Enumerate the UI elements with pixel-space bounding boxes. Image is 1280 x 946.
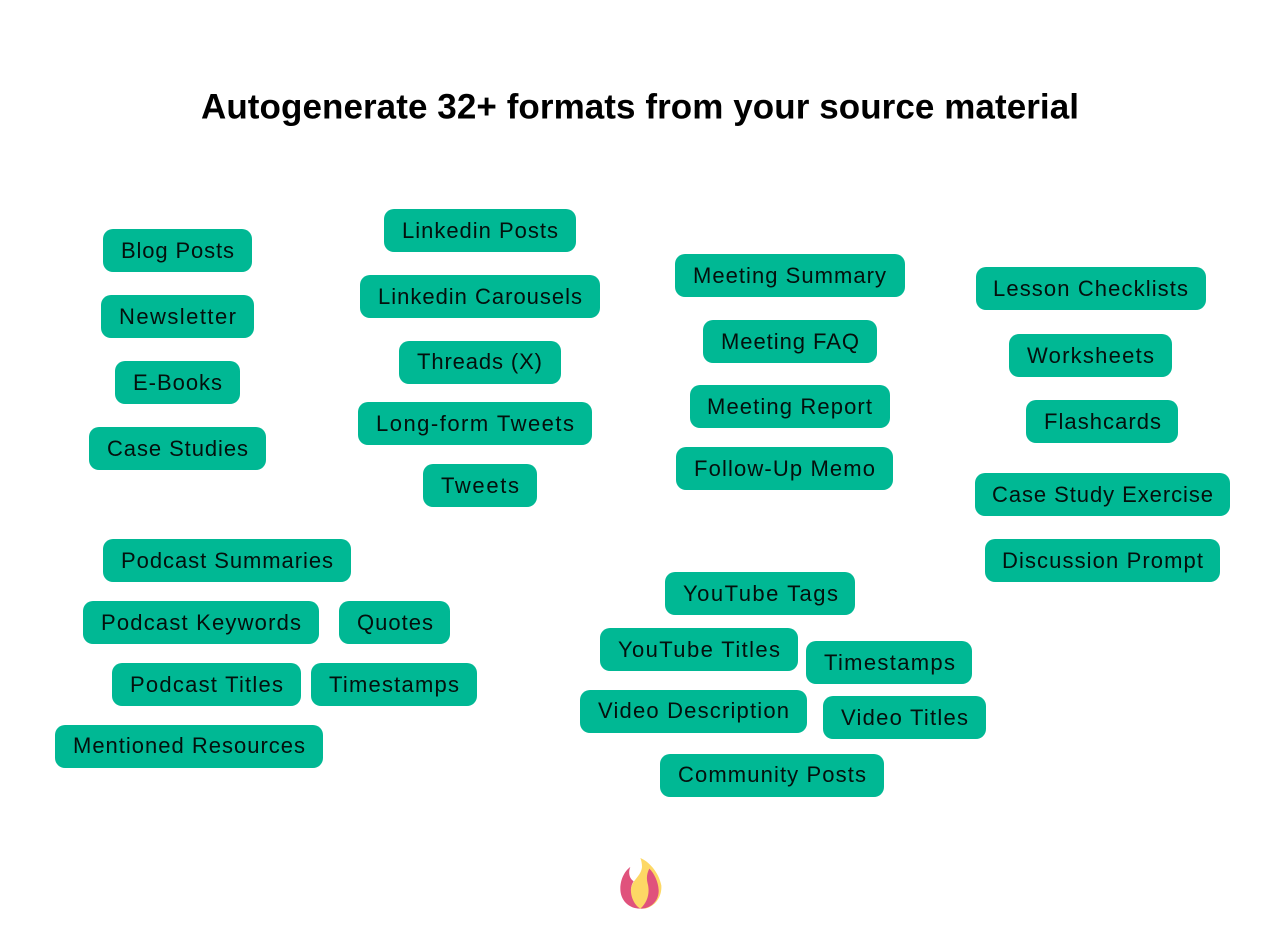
title: Autogenerate 32+ formats from your source material	[201, 88, 1079, 126]
pill: Meeting FAQ: Meeting FAQ	[721, 329, 859, 354]
pill: Blog Posts: Blog Posts	[121, 238, 234, 263]
pill: Podcast Keywords: Podcast Keywords	[101, 610, 301, 635]
pill: Podcast Summaries: Podcast Summaries	[121, 548, 333, 573]
pill: Timestamps: Timestamps	[824, 650, 955, 675]
pill: YouTube Titles: YouTube Titles	[618, 637, 780, 662]
pill: Follow-Up Memo	[676, 447, 893, 490]
pill: Follow-Up Memo: Follow-Up Memo	[694, 456, 875, 481]
pill: Case Study Exercise: Case Study Exercise	[992, 482, 1213, 507]
pill: Threads (X): Threads (X)	[417, 349, 542, 374]
pill: Case Studies	[89, 427, 266, 470]
pill: Meeting Summary	[675, 254, 905, 297]
pill: Case Study Exercise	[975, 473, 1230, 516]
pill: Discussion Prompt: Discussion Prompt	[1002, 548, 1203, 573]
pill: Threads (X)	[399, 341, 561, 384]
pill: Community Posts	[660, 754, 884, 797]
pill: Meeting FAQ	[703, 320, 877, 363]
pill: Linkedin Carousels	[360, 275, 600, 318]
pill: YouTube Titles	[600, 628, 798, 671]
pill: Linkedin Carousels: Linkedin Carousels	[378, 284, 582, 309]
pill: Podcast Keywords	[83, 601, 319, 644]
pill: E-Books	[115, 361, 240, 404]
panel: course formats	[975, 267, 1230, 582]
pill: Timestamps	[311, 663, 477, 706]
pill: Worksheets: Worksheets	[1027, 343, 1154, 368]
panel: meeting formats	[675, 254, 905, 490]
pill: Quotes	[339, 601, 450, 644]
pill: Video Titles: Video Titles	[841, 705, 968, 730]
pill: E-Books: E-Books	[133, 370, 222, 395]
pill: Mentioned Resources	[55, 725, 323, 768]
pill: Lesson Checklists: Lesson Checklists	[993, 276, 1188, 301]
pill: Linkedin Posts	[384, 209, 576, 252]
pill: Long-form Tweets: Long-form Tweets	[376, 411, 574, 436]
pill: Worksheets	[1009, 334, 1172, 377]
pill: Long-form Tweets	[358, 402, 592, 445]
pill: Newsletter	[101, 295, 254, 338]
pill: YouTube Tags	[665, 572, 855, 615]
pill: Meeting Summary: Meeting Summary	[693, 263, 886, 288]
pill: Flashcards	[1026, 400, 1178, 443]
pill: Tweets	[423, 464, 537, 507]
panel: social formats	[358, 209, 600, 507]
pill: Mentioned Resources: Mentioned Resources	[73, 733, 305, 758]
panel: written content formats	[89, 229, 266, 470]
pill: Flashcards: Flashcards	[1044, 409, 1161, 434]
icon: flame logo	[620, 858, 661, 909]
pill: Podcast Titles	[112, 663, 301, 706]
panel: video formats	[580, 572, 986, 797]
pill: Tweets: Tweets	[441, 473, 519, 498]
pill: Quotes: Quotes	[357, 610, 433, 635]
pill: Lesson Checklists	[976, 267, 1206, 310]
pill: Discussion Prompt	[985, 539, 1220, 582]
panel: podcast formats	[55, 539, 477, 768]
pill: Podcast Titles: Podcast Titles	[130, 672, 283, 697]
pill: Newsletter: Newsletter	[119, 304, 236, 329]
pill: Video Description	[580, 690, 807, 733]
pill: Podcast Summaries	[103, 539, 351, 582]
pill: Case Studies: Case Studies	[107, 436, 248, 461]
pill: Timestamps	[806, 641, 972, 684]
pill: Video Description: Video Description	[598, 698, 789, 723]
pill: Meeting Report	[690, 385, 890, 428]
pill: Community Posts: Community Posts	[678, 762, 866, 787]
pill: Meeting Report: Meeting Report	[707, 394, 872, 419]
pill: YouTube Tags: YouTube Tags	[683, 581, 838, 606]
pill: Blog Posts	[103, 229, 252, 272]
pill: Timestamps: Timestamps	[329, 672, 459, 697]
pill: Video Titles	[823, 696, 986, 739]
pill: Linkedin Posts: Linkedin Posts	[402, 218, 558, 243]
